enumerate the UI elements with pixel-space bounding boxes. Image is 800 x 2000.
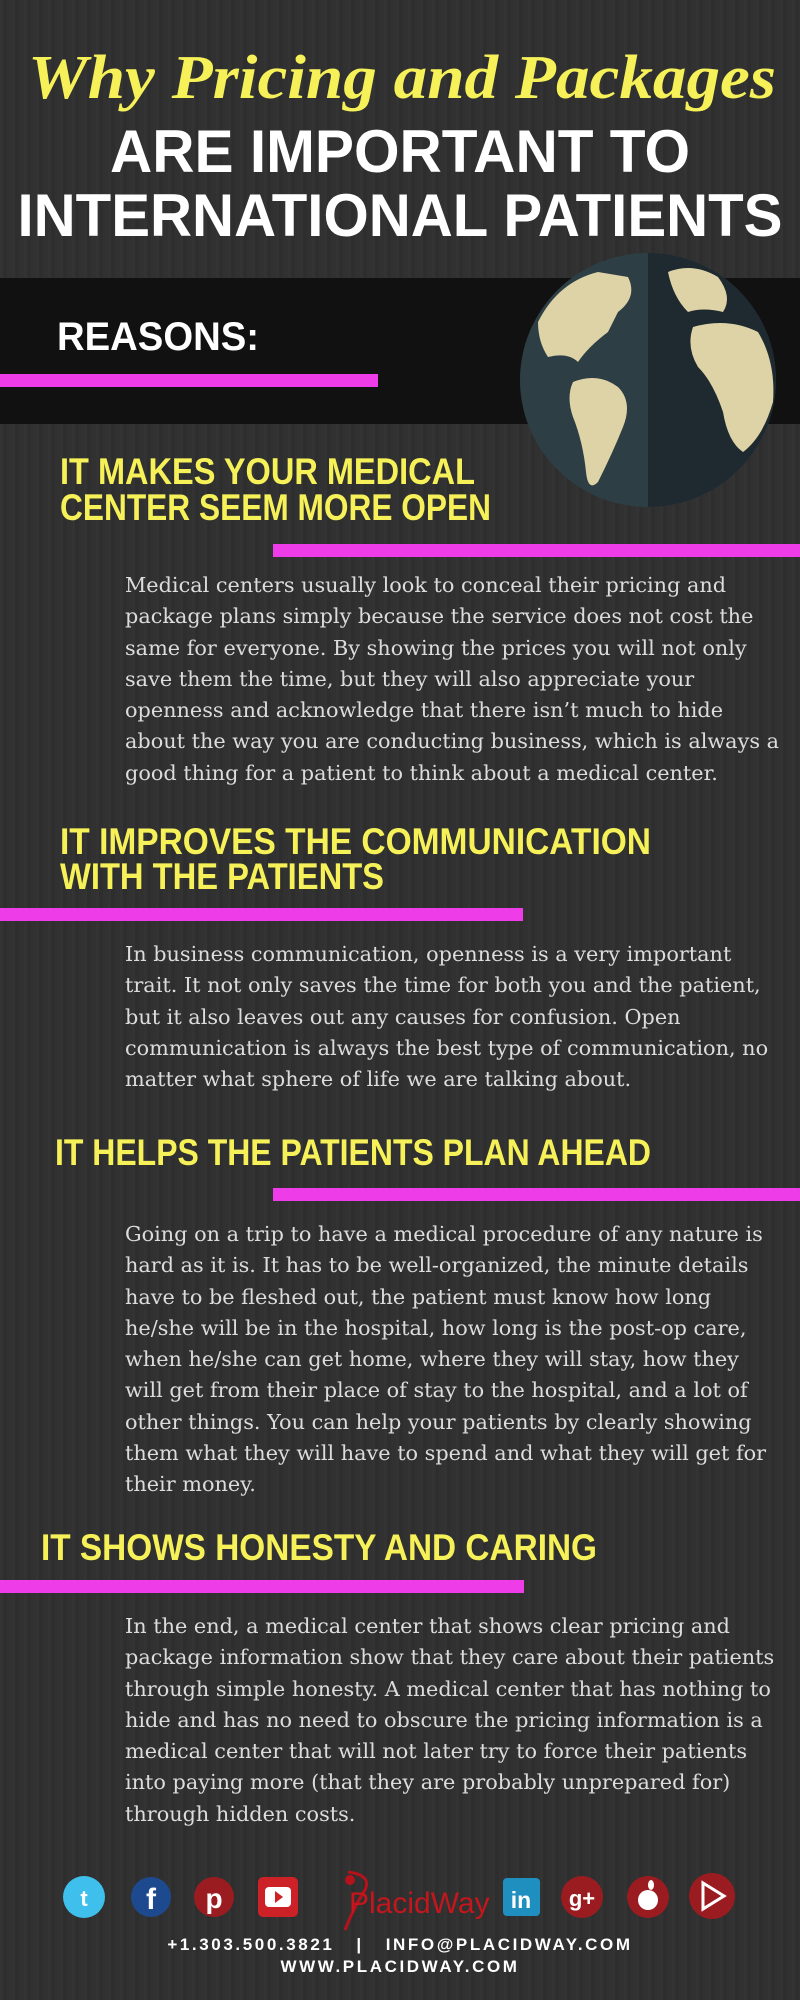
body 2: trait. It not only saves the time for both you and the patient,: [125, 973, 761, 997]
icon: linkedin: [503, 1878, 540, 1916]
footer contact: +1.303.500.3821 | INFO@PLACIDWAY.COM: [167, 1935, 633, 1954]
footer contact: WWW.PLACIDWAY.COM: [280, 1957, 520, 1976]
icon: apple: [627, 1876, 669, 1918]
body 3: their money.: [125, 1472, 256, 1496]
pink bar 4: [0, 1580, 524, 1593]
body 3: Going on a trip to have a medical procedure of any nature is: [125, 1222, 763, 1246]
body 1: openness and acknowledge that there isn’t much to hide: [125, 698, 723, 722]
title: [18, 44, 782, 245]
icon: youtube: [258, 1877, 298, 1917]
body 3: them what they will have to spend and what they will get for: [125, 1441, 766, 1465]
body 1: [125, 573, 779, 785]
body 4: medical center that will not later try to force their patients: [125, 1739, 747, 1763]
body 1: Medical centers usually look to conceal their pricing and: [125, 573, 726, 597]
body 4: hide and has no need to obscure the pricing information is a: [125, 1708, 763, 1732]
body 3: [125, 1222, 766, 1496]
body 4: In the end, a medical center that shows clear pricing and: [125, 1614, 730, 1638]
body 1: same for everyone. By showing the prices you will not only: [125, 636, 747, 660]
pink bar 3: [273, 1188, 800, 1201]
pink bar reasons: [0, 374, 378, 387]
logo: placidway: PlacidWay: [349, 1887, 490, 1920]
body 3: other things. You can help your patients by clearly showing: [125, 1410, 752, 1434]
icon: facebook: [131, 1877, 171, 1917]
icon: linkedin: in: [511, 1887, 531, 1913]
icon: twitter: t: [80, 1886, 88, 1911]
body 1: save them the time, but they will also appreciate your: [125, 667, 694, 691]
icon: play: [689, 1873, 735, 1919]
body 4: through simple honesty. A medical center that has nothing to: [125, 1677, 771, 1701]
heading 2: [60, 821, 651, 895]
heading 1: [60, 451, 491, 525]
body 2: matter what sphere of life we are talking about.: [125, 1067, 631, 1091]
body 4: into paying more (that they are probably unprepared for): [125, 1770, 730, 1794]
icon: twitter: [63, 1876, 105, 1918]
title: ARE IMPORTANT TO: [110, 118, 690, 185]
icon: pinterest: [194, 1877, 234, 1917]
body 3: have to be fleshed out, the patient must know how long: [125, 1285, 711, 1309]
body 4: through hidden costs.: [125, 1802, 355, 1826]
icon: globe: [520, 253, 776, 507]
body 1: good thing for a patient to think about a medical center.: [125, 761, 718, 785]
body 1: about the way you are conducting business, which is always a: [125, 729, 779, 753]
body 3: when he/she can get home, where they will stay, how they: [125, 1347, 739, 1371]
body 2: but it also leaves out any causes for confusion. Open: [125, 1005, 681, 1029]
icon: pinterest: p: [205, 1883, 223, 1914]
logo: placidway: [345, 1872, 490, 1930]
icon: google plus: g+: [569, 1886, 595, 1911]
pink bar 2: [0, 908, 523, 921]
reasons band: [0, 278, 800, 424]
pink bar 1: [273, 544, 800, 557]
body 4: package information show that they care about their patients: [125, 1645, 774, 1669]
body 3: will get from their place of stay to the hospital, and a lot of: [125, 1378, 748, 1402]
body 4: [125, 1614, 774, 1826]
body 3: he/she will be in the hospital, how long is the post-op care,: [125, 1316, 746, 1340]
body 1: package plans simply because the service does not cost the: [125, 604, 753, 628]
footer contact: [167, 1935, 633, 1976]
body 2: [125, 942, 768, 1091]
icon: facebook: f: [146, 1883, 157, 1916]
body 2: In business communication, openness is a very important: [125, 942, 731, 966]
body 3: hard as it is. It has to be well-organized, the minute details: [125, 1253, 748, 1277]
icon: google plus: [561, 1876, 603, 1918]
body 2: communication is always the best type of communication, no: [125, 1036, 768, 1060]
footer icons: [63, 1870, 735, 1930]
title: Why Pricing and Packages: [28, 44, 776, 112]
